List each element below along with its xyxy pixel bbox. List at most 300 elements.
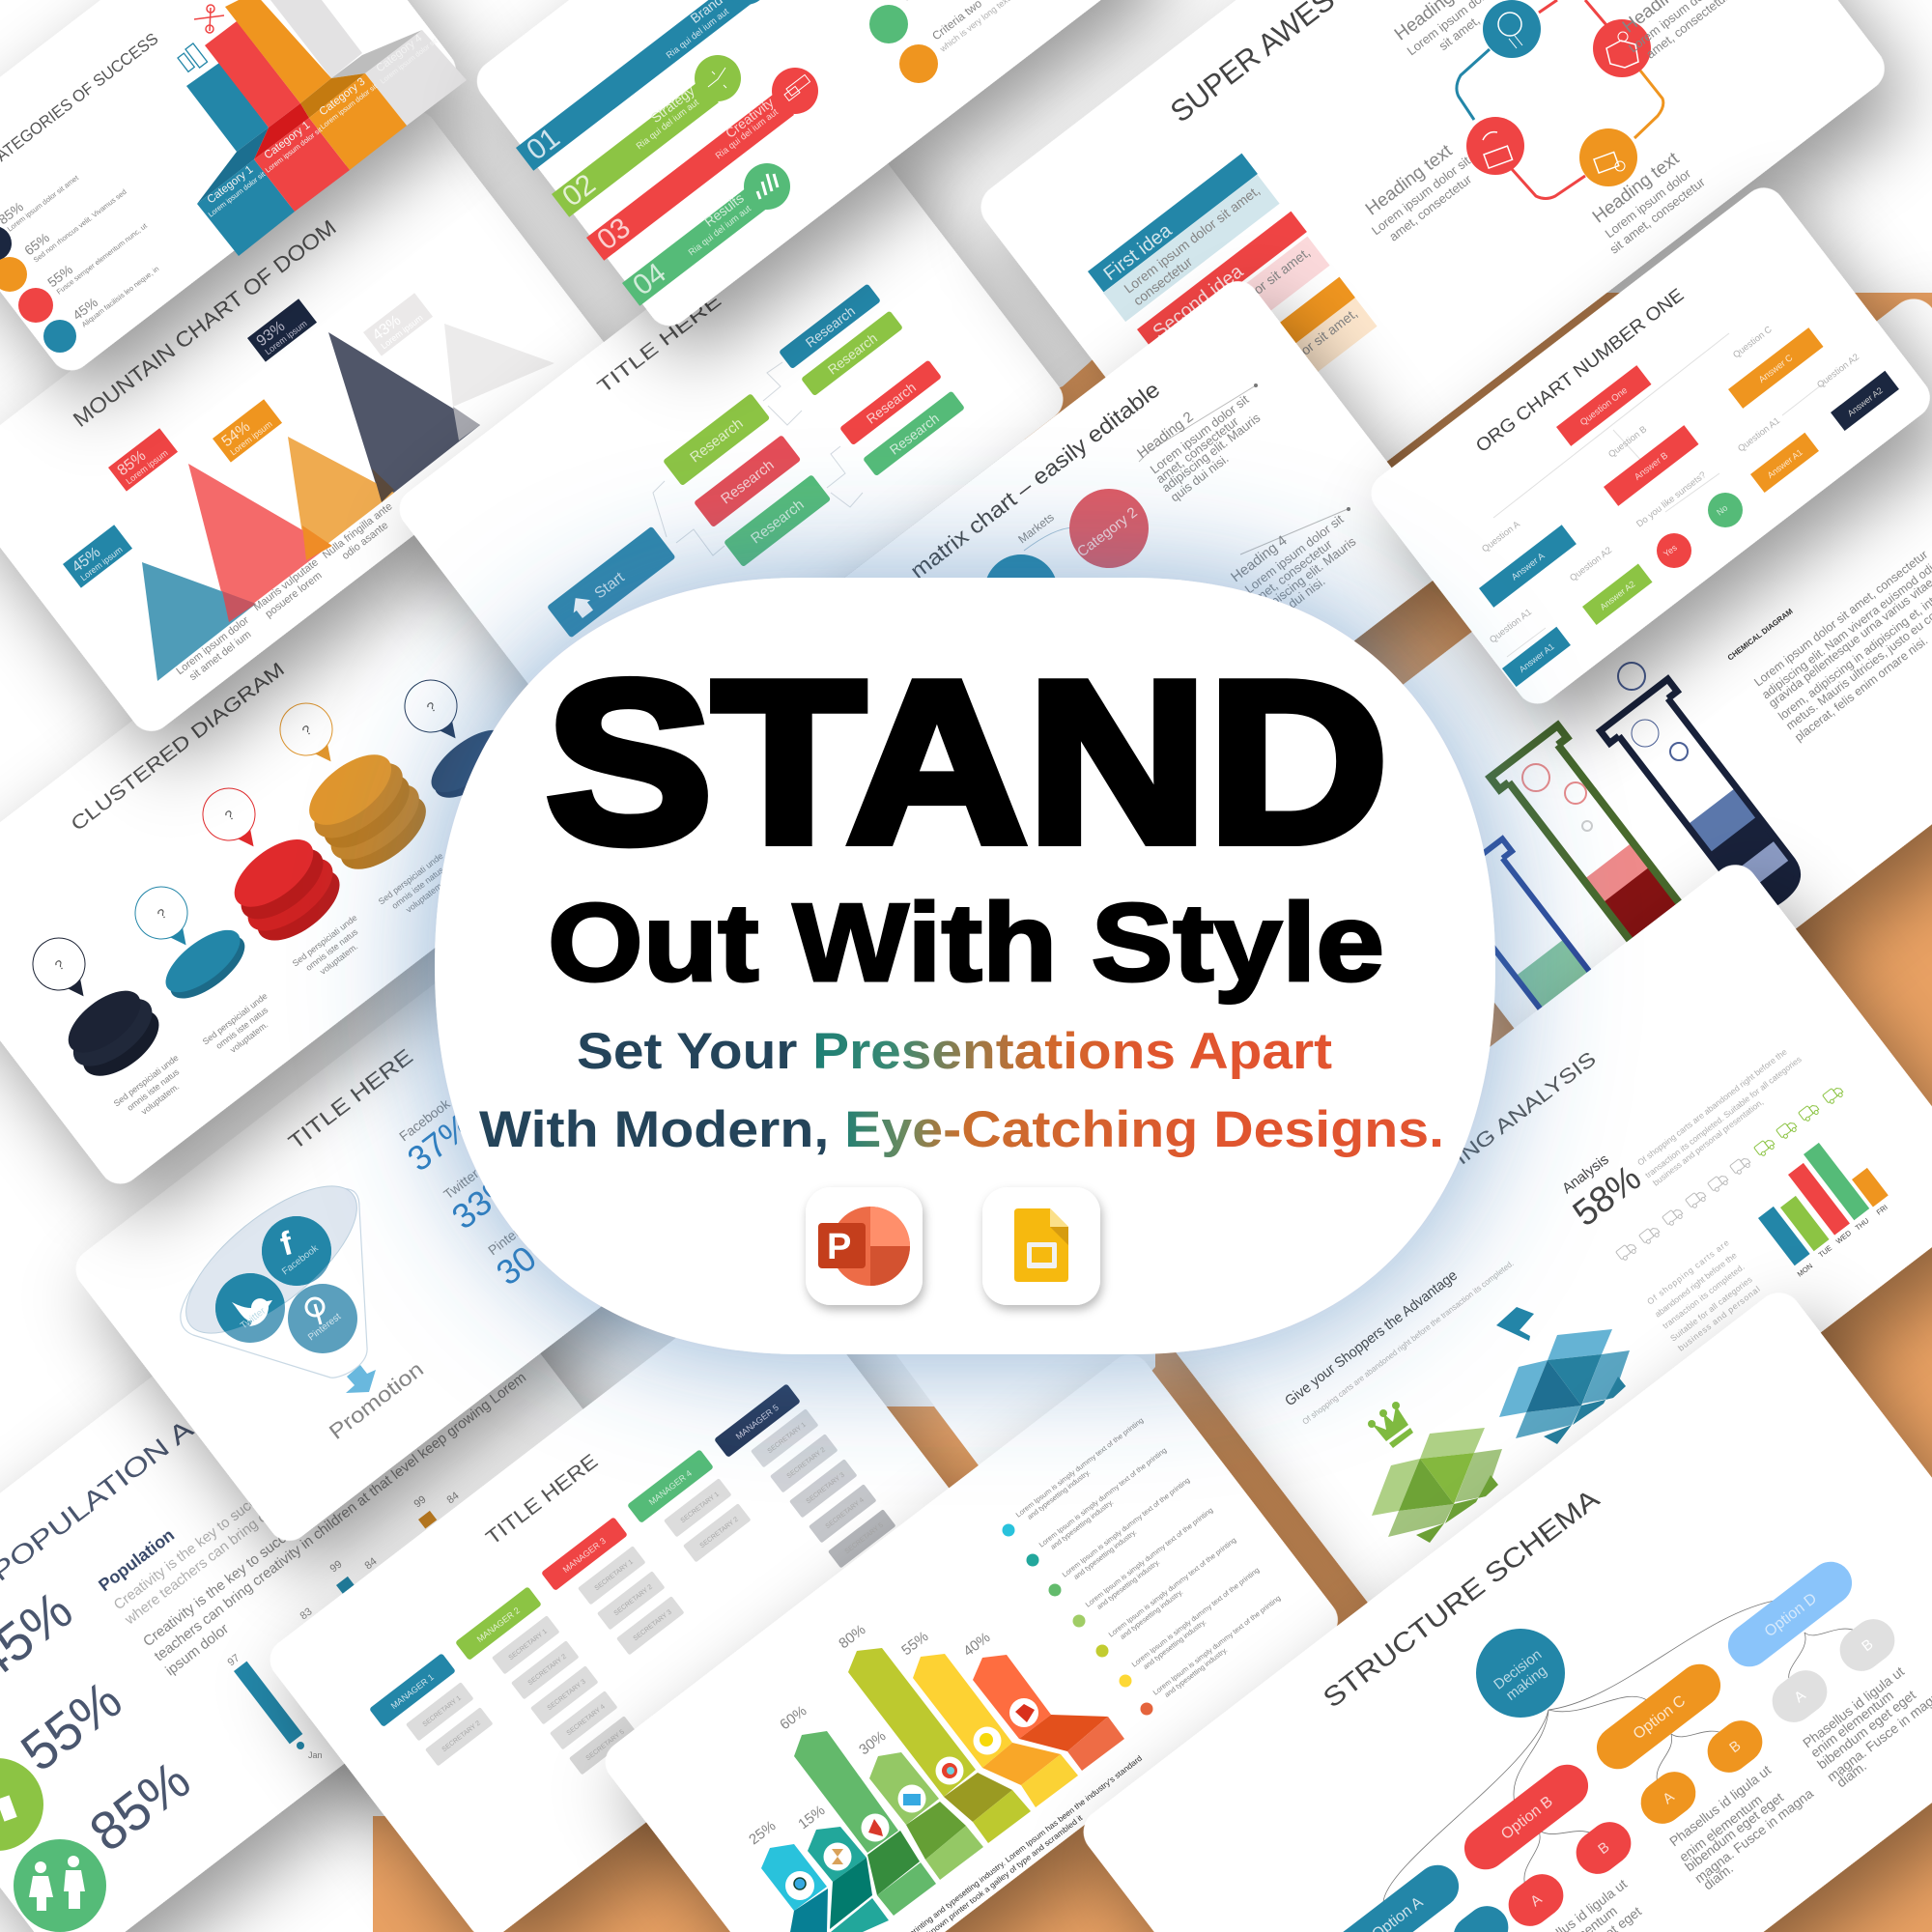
heading: TITLE HERE — [482, 1450, 602, 1549]
manager 3: MANAGER 3 — [561, 1536, 608, 1575]
legend text: and typesetting industry. — [1163, 1645, 1229, 1699]
secretaries — [406, 1408, 896, 1775]
secretaries: SECRETARY 1 — [508, 1628, 549, 1662]
pin: black: ? — [52, 956, 68, 974]
stats list: Facebook — [396, 1095, 453, 1144]
list text: Fusce semper elementum nunc, ut — [55, 221, 150, 297]
blob shape — [435, 578, 1495, 1354]
category labels: Category 4 — [375, 32, 425, 74]
paragraph: Lorem ipsum dolor sit amet, consectetur — [1751, 548, 1930, 689]
subheading: Give your Shoppers the Advantage — [1282, 1267, 1461, 1409]
captions: Sed perspiciati unde — [112, 1053, 181, 1108]
card — [469, 0, 1156, 334]
slide: chemical diagram — [1307, 290, 1932, 1110]
category labels: Category 3 — [318, 76, 367, 118]
heading 2 block: adipiscing elit. Mauris — [1159, 411, 1264, 495]
manager 5 — [714, 1383, 801, 1458]
percent labels — [746, 1622, 993, 1848]
circle: category 1 — [984, 554, 1058, 628]
sub text: Of shopping carts are abandoned right before the transaction its completed. — [1300, 1258, 1516, 1427]
pin: blue: ? — [155, 905, 170, 923]
slide: structure schema — [1074, 1284, 1932, 1932]
card — [0, 492, 653, 1192]
question labels: Do you like sunsets? — [1634, 469, 1708, 529]
arcs — [1024, 527, 1174, 613]
arrow — [346, 1365, 376, 1393]
secretaries: SECRETARY 2 — [786, 1446, 827, 1480]
left paragraph: abandoned right before the — [1653, 1250, 1739, 1320]
icon: google slides — [982, 1187, 1100, 1305]
slide: numbered bars — [469, 0, 1156, 334]
legend text: Lorem Ipsum is simply dummy text of the printing — [1130, 1566, 1261, 1669]
bar chart: 84 — [445, 1490, 462, 1506]
label 45: Lorem ipsum — [78, 545, 125, 582]
question labels: Question C — [1731, 325, 1775, 360]
hidden slide behind arrow infographic — [869, 1256, 1155, 1465]
card — [391, 139, 1071, 770]
pill: option d: Option D — [1762, 1590, 1820, 1640]
label 45: 45% — [70, 544, 103, 576]
bar chart: THU — [1854, 1216, 1870, 1233]
heading: matrix chart – easily editable — [905, 377, 1164, 583]
captions: voluptatem. — [404, 880, 445, 915]
question labels: Question A — [1480, 519, 1522, 554]
box: answer b — [1604, 425, 1699, 506]
column: teal 15 — [808, 1827, 889, 1932]
captions: voluptatem. — [228, 1020, 270, 1055]
card — [0, 1180, 666, 1932]
icon: crown — [1368, 1402, 1413, 1448]
secretaries: SECRETARY 5 — [585, 1728, 626, 1762]
block: third idea — [1185, 277, 1378, 444]
circle: decision making: Decision — [1491, 1646, 1545, 1693]
pin: blue — [125, 876, 207, 961]
question labels: Question A1 — [1736, 415, 1782, 454]
question labels: Question B — [1606, 424, 1649, 460]
circle: decision making: making — [1503, 1662, 1550, 1704]
captions: sit amet, — [1436, 13, 1483, 53]
bar 04: Results — [701, 190, 747, 230]
circle: yes — [1657, 533, 1691, 568]
slide: managers title here — [262, 1262, 998, 1932]
bubbles: green tube — [1522, 764, 1592, 831]
paragraph column 1: Phasellus id ligula ut — [1666, 1762, 1774, 1849]
title: out with style: Out With Style — [548, 882, 1384, 1005]
block: first idea: First idea — [1100, 219, 1177, 285]
subtitle line 2: With Modern, Eye-Catching Designs. — [479, 1101, 1444, 1158]
heading 4 block: quis dui nisi. — [1264, 574, 1328, 627]
box: answer a2 navy — [1831, 371, 1899, 431]
captions: voluptatem. — [139, 1082, 181, 1117]
list text: 45% — [70, 295, 100, 323]
question labels: Question A2 — [1815, 352, 1861, 390]
pill: option b: Option B — [1498, 1793, 1556, 1843]
label: promotion: Promotion — [325, 1357, 428, 1444]
circle: twitter: Twitter — [239, 1305, 269, 1331]
pin: orange — [270, 693, 352, 778]
card — [0, 0, 464, 379]
bar chart: 99 — [328, 1558, 345, 1575]
icon: pencil and ruler — [178, 43, 208, 71]
box: question one: Question One — [1578, 385, 1630, 428]
arrow columns — [761, 1648, 1124, 1932]
pill: option d — [1719, 1553, 1861, 1675]
manager 2 — [455, 1586, 542, 1661]
percent labels: 15% — [795, 1803, 828, 1833]
legend text — [1014, 1416, 1288, 1704]
pill: option c — [1588, 1656, 1729, 1777]
pin: navy — [394, 669, 476, 754]
bar chart: 84 — [363, 1555, 380, 1572]
card — [972, 0, 1893, 566]
box: answer c — [1728, 327, 1824, 409]
title: stand: STAND — [546, 635, 1388, 891]
box: research 5 — [801, 310, 903, 396]
heading: TITLE HERE — [594, 290, 725, 398]
circle: no — [1708, 493, 1743, 527]
secretaries: SECRETARY 2 — [613, 1583, 654, 1617]
bubbles: navy tube — [1618, 663, 1688, 760]
paragraph column 2: bibendum eget eget — [1814, 1687, 1918, 1772]
pin: red — [192, 778, 274, 863]
captions: Nulla fringilla ante — [321, 500, 395, 561]
card — [744, 272, 1462, 941]
secretaries: SECRETARY 2 — [441, 1719, 482, 1753]
category labels: Category 1 — [206, 164, 255, 206]
column: yellow 55 — [913, 1654, 1078, 1807]
manager 5: MANAGER 5 — [734, 1403, 781, 1441]
legend text: and typesetting industry. — [1095, 1557, 1161, 1611]
box: answer a1 orange: Answer A1 — [1766, 447, 1804, 480]
paragraph column 1: diam. — [1700, 1861, 1736, 1892]
bar chart: 83 — [298, 1605, 315, 1622]
stack: orange — [295, 739, 440, 884]
category labels: Lorem ipsum dolor sit — [319, 81, 380, 131]
card — [262, 1262, 998, 1932]
captions: Heading text — [1589, 148, 1684, 227]
box: research 4 — [779, 283, 881, 369]
stack: navy — [421, 719, 521, 810]
stats list: 30% — [489, 1219, 568, 1293]
column: cyan 25 — [761, 1844, 828, 1932]
box: research 6: Research — [864, 380, 919, 427]
captions: odio asante — [340, 520, 390, 562]
label 93: 93% — [254, 318, 288, 350]
circle: twitter — [215, 1273, 285, 1343]
question labels: Question A1 — [1488, 607, 1534, 645]
legend text: Lorem Ipsum is simply dummy text of the printing — [1014, 1416, 1145, 1520]
test tube: navy — [1601, 679, 1816, 924]
box: answer a2 green — [1582, 564, 1653, 625]
box: answer a1 orange — [1750, 433, 1819, 493]
bar 04: 04 — [627, 257, 672, 302]
captions — [174, 500, 402, 687]
captions: Mauris vulputate — [252, 556, 321, 613]
bar 03 — [586, 68, 818, 261]
slide: matrix chart — [744, 272, 1462, 941]
box: answer b: Answer B — [1633, 450, 1670, 483]
connector curves — [1383, 1600, 1856, 1904]
box: research 2 — [694, 435, 801, 527]
secretaries: SECRETARY 4 — [566, 1703, 607, 1737]
list text: 65% — [21, 230, 52, 258]
analysis stat: Analysis — [1559, 1151, 1612, 1197]
label: markets: Markets — [1015, 510, 1057, 546]
text block: Population — [95, 1525, 178, 1595]
label 43: 43% — [370, 312, 404, 344]
folded columns — [186, 0, 467, 256]
left paragraph: transaction its completed. — [1661, 1262, 1747, 1331]
label 85: 85% — [115, 447, 149, 479]
label 93 — [247, 298, 317, 362]
captions: voluptatem. — [318, 942, 359, 977]
card — [1307, 290, 1932, 1101]
stack: red — [220, 824, 354, 955]
heading: MOUNTAIN CHART OF DOOM — [69, 215, 341, 432]
box: research 3: Research — [748, 497, 808, 547]
heading 2 block: quis dui nisi. — [1168, 451, 1232, 504]
card — [68, 842, 837, 1549]
label 43 — [363, 293, 433, 356]
card — [1074, 1284, 1932, 1932]
legend text: Lorem Ipsum is simply dummy text of the printing — [1107, 1536, 1237, 1639]
percent labels: 40% — [960, 1630, 993, 1660]
list text: Sed non rhoncus velit. Vivamus sed — [32, 187, 128, 265]
pin: black — [22, 927, 104, 1012]
left paragraph: business and personal — [1676, 1284, 1762, 1353]
paragraph: ipsum dolor — [162, 1621, 232, 1679]
box: research 7: Research — [887, 411, 942, 458]
stats list — [396, 1095, 568, 1293]
paragraph: Creativity is the key to success — [140, 1517, 307, 1650]
secretaries: SECRETARY 1 — [680, 1491, 721, 1524]
label 54: 54% — [219, 418, 253, 450]
paragraph column 1: bibendum eget eget — [1682, 1789, 1786, 1874]
bar chart — [1758, 1143, 1889, 1279]
heading 4 block: Lorem ipsum dolor sit — [1242, 512, 1347, 596]
card — [597, 1347, 1347, 1932]
bar 01: 01 — [521, 122, 566, 167]
bar chart: FRI — [1875, 1203, 1889, 1217]
paragraph column 2: diam. — [1833, 1758, 1869, 1790]
bar 02 — [552, 55, 741, 217]
pin: orange: ? — [299, 722, 315, 739]
manager 4 — [627, 1449, 714, 1523]
circle: facebook: f — [276, 1225, 298, 1264]
bar 03: 03 — [591, 212, 637, 257]
heading: SHOPPING ANALYSIS — [1381, 1048, 1601, 1223]
block: third idea: Lorem ipsum dolor sit amet, — [1218, 305, 1360, 419]
pill: option b — [1456, 1756, 1597, 1878]
bar 01: Ria qui del ium aut — [665, 6, 731, 61]
box: start: Start — [592, 569, 628, 602]
captions: sit amet del ium — [187, 629, 253, 683]
captions: omnis iste natus — [304, 926, 360, 973]
label 54: Lorem ipsum — [228, 419, 274, 457]
ovals: B — [1595, 1839, 1612, 1858]
legend text: Lorem Ipsum is simply dummy text of the printing — [1061, 1476, 1191, 1579]
heading: STRUCTURE SCHEMA — [1318, 1483, 1605, 1714]
circle: decision making — [1476, 1629, 1565, 1718]
question labels — [1480, 325, 1861, 645]
legend text: and typesetting industry. — [1072, 1527, 1138, 1581]
text block: business and personal presentation, — [1651, 1097, 1765, 1188]
text block: where teachers can bring creativity — [121, 1478, 310, 1629]
card — [1145, 856, 1932, 1651]
label 93: Lorem ipsum — [263, 319, 309, 356]
circle: yes: Yes — [1662, 542, 1679, 559]
icon: truck — [1579, 128, 1637, 186]
manager 3 — [541, 1517, 628, 1591]
circle: no: No — [1715, 503, 1729, 518]
heading 4 block: Heading 4 — [1228, 532, 1291, 585]
captions: Lorem ipsum dolor sit — [1369, 153, 1473, 238]
paragraph: placerat, felis enim ornare nisi. — [1792, 634, 1930, 744]
slide: mountain chart — [0, 103, 627, 739]
icon badges — [785, 1698, 1038, 1900]
heading: CLUSTERED DIAGRAM — [68, 659, 289, 836]
secretaries: SECRETARY 3 — [633, 1608, 673, 1642]
criteria list — [869, 0, 1011, 83]
stat 55: 55% — [10, 1668, 132, 1783]
test tube: blue — [1435, 838, 1670, 1110]
circle: category 2 — [1069, 489, 1149, 568]
label 43: Lorem ipsum — [379, 313, 425, 351]
bar chart: TUE — [1817, 1243, 1833, 1260]
stat 85: 85% — [78, 1748, 201, 1863]
icon: powerpoint — [806, 1187, 923, 1305]
secretaries: SECRETARY 1 — [422, 1694, 463, 1728]
secretaries: SECRETARY 2 — [527, 1653, 568, 1687]
percent labels: 80% — [836, 1622, 868, 1652]
box: research 5: Research — [825, 330, 880, 378]
column: light green 30 — [869, 1752, 983, 1880]
icon: person circle — [0, 1758, 43, 1851]
icon: flag — [1496, 1307, 1534, 1341]
category labels: Lorem ipsum dolor sit — [207, 169, 268, 219]
legend text: and typesetting industry. — [1026, 1467, 1092, 1521]
captions — [112, 851, 459, 1126]
box: research 4: Research — [803, 303, 858, 351]
secretaries: SECRETARY 1 — [594, 1558, 635, 1592]
pill: option c: Option C — [1631, 1692, 1689, 1743]
box: research 2: Research — [718, 457, 778, 507]
legend text: Lorem Ipsum is simply dummy text of the printing — [1151, 1594, 1282, 1697]
left paragraph: Suitable for all categories — [1668, 1274, 1754, 1344]
bar 03: Ria qui del ium aut — [714, 106, 781, 161]
ovals: A — [1660, 1789, 1677, 1807]
stats list: 37% — [400, 1105, 479, 1179]
funnel — [163, 1161, 380, 1378]
orange backdrop panel — [373, 293, 1932, 1932]
paragraph column 1: magna. Fusce in magna — [1691, 1785, 1816, 1886]
paragraph column 2: Phasellus id ligula ut — [1800, 1663, 1907, 1750]
captions: omnis iste natus — [126, 1066, 182, 1113]
legend text: and typesetting industry. — [1142, 1617, 1208, 1671]
captions: Lorem ipsum dolor — [1603, 165, 1694, 241]
connectors — [1493, 333, 1826, 657]
label 45 — [63, 525, 132, 588]
category labels: Lorem ipsum dolor sit — [379, 36, 440, 86]
category labels: Lorem ipsum dolor sit — [264, 125, 325, 175]
captions: Sed perspiciati unde — [291, 913, 359, 968]
paragraph: teachers can bring creativity in children at that level keep growing Lorem — [152, 1369, 529, 1664]
bar chart — [226, 1490, 462, 1760]
block: second idea: Second idea — [1150, 260, 1248, 343]
cycle arrows — [1457, 0, 1663, 199]
icon: map — [1593, 19, 1651, 77]
circle: pinterest — [288, 1284, 357, 1353]
percent labels: 55% — [898, 1629, 931, 1659]
subtitle line 1: Set Your Presentations Apart — [577, 1023, 1332, 1080]
circle: pinterest: Pinterest — [306, 1311, 343, 1343]
icon: tools — [194, 5, 224, 33]
captions: omnis iste natus — [390, 865, 446, 911]
diamonds: blue — [1499, 1329, 1630, 1444]
paragraph column 1: enim elementum — [1676, 1792, 1765, 1864]
icon: couple circle — [14, 1839, 106, 1932]
truck icon row — [1616, 1084, 1845, 1262]
box: research 7 — [863, 390, 965, 476]
bar chart: 99 — [412, 1493, 429, 1510]
box: answer a: Answer A — [1510, 551, 1548, 582]
ovals: B — [1726, 1738, 1744, 1756]
card — [1363, 180, 1932, 712]
heading 4 block: adipiscing elit. Mauris — [1255, 534, 1359, 618]
secretaries: SECRETARY 5 — [844, 1521, 885, 1555]
box: answer a1 blue — [1502, 627, 1571, 687]
bar 04: Ria qui del ium aut — [687, 203, 753, 258]
ovals: A — [1527, 1891, 1545, 1910]
heading 2 block — [1134, 384, 1264, 504]
slide: shopping analysis — [1145, 856, 1932, 1651]
left paragraph: Of shopping carts are — [1645, 1237, 1731, 1307]
left paragraph — [1645, 1237, 1762, 1353]
percent labels: 30% — [856, 1728, 889, 1758]
captions: Lorem ipsum dolor — [174, 614, 251, 677]
secretaries: SECRETARY 3 — [547, 1678, 587, 1712]
box: research 1 — [663, 393, 770, 486]
legend dots — [1003, 1524, 1153, 1716]
heading: ORG CHART NUMBER ONE — [1472, 285, 1688, 457]
bar 02: 02 — [556, 168, 602, 213]
stack: blue — [156, 919, 255, 1009]
diamonds: green — [1372, 1428, 1502, 1543]
heading 4 block: amet, consectetur — [1247, 536, 1335, 609]
pin: navy: ? — [424, 698, 440, 716]
ovals: A — [1791, 1688, 1808, 1706]
captions: omnis iste natus — [214, 1005, 270, 1051]
box: research 3 — [724, 474, 831, 567]
ovals — [1445, 1610, 1903, 1932]
block: first idea — [1088, 154, 1280, 322]
bar 01 — [516, 0, 779, 171]
stats list: Pinterest — [485, 1213, 537, 1258]
slide: super awesome — [972, 0, 1893, 566]
block: first idea: consectetur — [1130, 253, 1195, 308]
category labels: Category 1 — [263, 120, 312, 161]
column: olive 80 — [848, 1648, 1031, 1843]
slide: research flow title here — [391, 139, 1071, 770]
category labels — [206, 32, 440, 219]
ovals: B — [1859, 1636, 1876, 1655]
bar 02: Ria qui del ium aut — [635, 97, 701, 152]
label 54 — [213, 399, 282, 463]
icon: factory — [1466, 117, 1524, 175]
analysis stat: 58% — [1566, 1158, 1649, 1235]
box: answer c: Answer C — [1757, 353, 1795, 385]
slide: arrow infographic — [597, 1347, 1347, 1932]
